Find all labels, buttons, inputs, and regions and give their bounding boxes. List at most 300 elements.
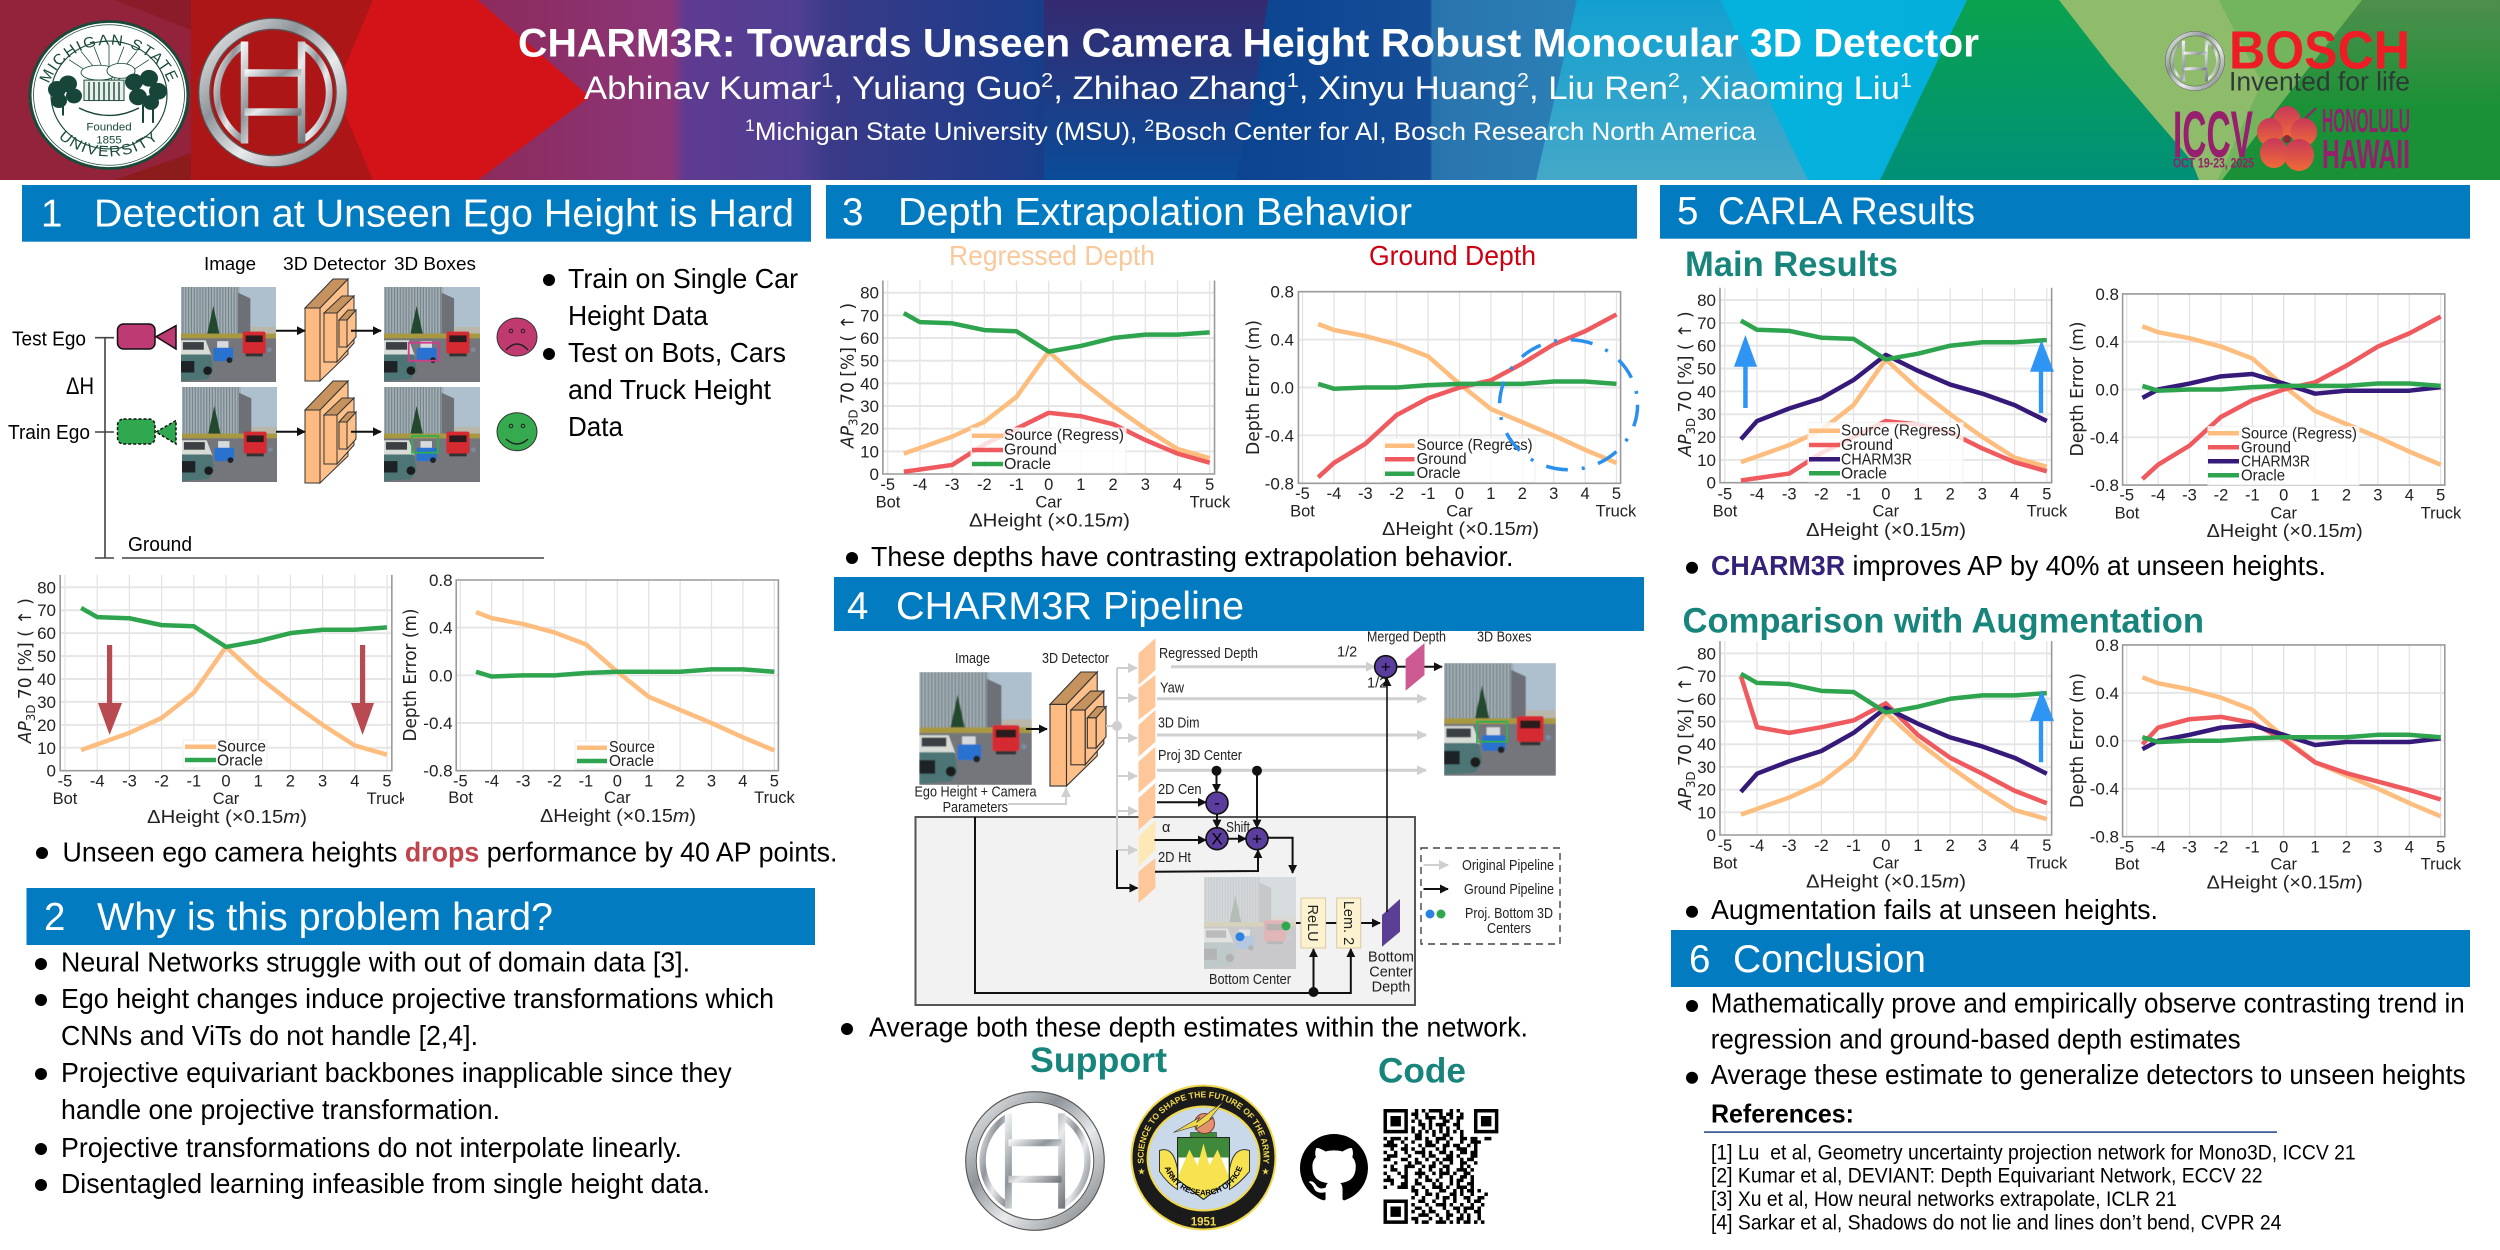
diagram: pipeline: + xyxy=(1381,658,1391,676)
chart: depth error source vs oracle: 0.4 xyxy=(429,619,453,638)
logo: Army Research Office: ARMY RESEARCH OFFICE xyxy=(1164,1166,1242,1196)
legend: Oracle xyxy=(2241,467,2285,484)
chart: AP regressed vs ground: 10 xyxy=(860,442,879,461)
heading 1 xyxy=(22,185,811,242)
authors: , Xinyu Huang xyxy=(1299,70,1517,106)
chart: depth error source vs oracle: 2 xyxy=(676,773,685,791)
legend xyxy=(1384,437,1535,482)
chart: AP augmentation comparison: 30 xyxy=(1697,758,1716,777)
ReLU box: ReLU xyxy=(1304,904,1320,942)
chart: depth augmentation comparison: 5 xyxy=(2436,838,2445,856)
chart: AP source vs oracle: 70 [%] ( ↑ ) xyxy=(16,598,36,705)
references: [2] Kumar et al, DEVIANT: Depth Equivariant Network, ECCV 22 xyxy=(1711,1165,2262,1188)
diagram: pipeline: Regressed Depth xyxy=(1159,646,1258,662)
chart: AP regressed vs ground: Car xyxy=(1035,494,1062,512)
chart: depth augmentation comparison: 1 xyxy=(2311,838,2320,856)
chart: depth augmentation comparison: -3 xyxy=(2182,838,2197,856)
text: reasons list xyxy=(35,947,774,1199)
affiliations: Bosch Center for AI, Bosch Research North America xyxy=(1154,118,1756,146)
chart: AP augmentation comparison: -2 xyxy=(1814,837,1829,855)
heading 6: Conclusion xyxy=(1733,938,1926,981)
logo: ICCV Honolulu Hawaii: OCT 19-23, 2025 xyxy=(2173,155,2254,171)
subheading: comparison with augmentation: Comparison with Augmentation xyxy=(1682,601,2204,640)
chart: AP augmentation comparison: -5 xyxy=(1717,837,1732,855)
chart: depth error source vs oracle: Bot xyxy=(448,789,473,807)
diagram: pipeline: 3D Detector xyxy=(1042,651,1109,667)
authors: 2 xyxy=(1041,70,1053,92)
pipeline legend xyxy=(1421,848,1560,944)
chart: depth augmentation comparison: 0.8 xyxy=(2095,636,2119,655)
callout: dashed ellipse xyxy=(1500,340,1638,470)
chart: AP regressed vs ground: 3 xyxy=(1141,476,1150,494)
logo: Army Research Office: ★ xyxy=(1137,1166,1146,1176)
text: train and test bullets: Data xyxy=(568,411,624,442)
chart: depth augmentation comparison: 3 xyxy=(2373,838,2382,856)
text: reasons list: Neural Networks struggle with out of domain data [3]. xyxy=(61,947,690,978)
chart: AP main results: 10 xyxy=(1697,451,1716,470)
chart: depth augmentation comparison: Truck xyxy=(2421,855,2462,873)
chart: AP main results: Truck xyxy=(2027,503,2068,521)
legend xyxy=(183,738,267,770)
chart: AP augmentation comparison: 50 xyxy=(1697,712,1716,732)
chart: AP source vs oracle: 0 xyxy=(47,762,56,781)
subtitle: ground depth: Ground Depth xyxy=(1369,240,1536,271)
chart: AP augmentation comparison: 20 xyxy=(1697,781,1716,800)
pipeline legend: Ground Pipeline xyxy=(1464,882,1554,898)
diagram: pipeline: Ego Height + Camera xyxy=(914,785,1037,801)
chart: AP source vs oracle: 80 xyxy=(37,578,56,597)
chart: AP augmentation comparison: 3 xyxy=(1978,837,1987,855)
chart: AP regressed vs ground: -3 xyxy=(945,476,959,494)
subtitle: regressed depth: Regressed Depth xyxy=(949,240,1155,271)
panel: section 2 why is this problem hard xyxy=(26,888,815,1199)
text: reasons list: CNNs and ViTs do not handle [2,4]. xyxy=(61,1020,478,1051)
chart: depth error source vs oracle: -0.8 xyxy=(423,762,453,781)
affiliations: Michigan State University (MSU), xyxy=(755,118,1144,146)
chart: depth main results: -2 xyxy=(2214,487,2228,505)
chart: depth error source vs oracle: Car xyxy=(604,789,631,807)
chart: depth error source vs oracle: -4 xyxy=(484,773,499,791)
logo: Bosch armature large xyxy=(199,18,347,167)
logo: Bosch armature support xyxy=(966,1092,1104,1230)
chart: AP augmentation comparison: 70 xyxy=(1697,667,1716,686)
pipeline legend: Centers xyxy=(1487,921,1531,937)
legend: Source xyxy=(609,739,655,756)
text: train and test bullets: Height Data xyxy=(568,300,709,331)
diagram: pipeline xyxy=(914,630,1560,1005)
chart: depth augmentation comparison: 2 xyxy=(2342,838,2351,856)
chart: AP regressed vs ground: Bot xyxy=(876,494,901,512)
logo: ICCV Honolulu Hawaii xyxy=(2173,97,2410,177)
diagram: pipeline: Merged Depth xyxy=(1367,630,1446,646)
text: train and test bullets xyxy=(543,263,798,442)
chart: depth augmentation comparison: -0.8 xyxy=(2090,828,2119,847)
ground pipeline box xyxy=(916,817,1415,1005)
chart: AP augmentation comparison: 10 xyxy=(1697,803,1716,822)
chart: depth error regressed vs ground: 0.0 xyxy=(1270,378,1294,398)
chart: depth main results: -1 xyxy=(2245,487,2260,505)
chart: AP augmentation comparison: ΔHeight (×0.15 m) xyxy=(1806,871,1966,891)
text: conclusion bullets: Average these estimate to generalize detectors to unseen heights xyxy=(1711,1059,2466,1090)
bottom center image xyxy=(1204,877,1296,969)
chart: depth main results: -4 xyxy=(2151,487,2165,505)
footer strip xyxy=(0,1056,2500,1236)
legend: Source xyxy=(217,738,266,756)
logo: ICCV Honolulu Hawaii: HAWAII xyxy=(2322,131,2410,177)
chart: AP regressed vs ground: 50 xyxy=(860,352,879,371)
authors: , Liu Ren xyxy=(1529,70,1668,106)
heading 3 xyxy=(826,185,1637,239)
chart: AP regressed vs ground: 40 xyxy=(860,374,879,393)
chart: depth error source vs oracle: 1 xyxy=(644,773,653,791)
diagram: pipeline: Image xyxy=(955,651,990,667)
chart: AP main results: 70 xyxy=(1697,314,1716,333)
panel: support and code xyxy=(965,1041,1498,1231)
heading 5: CARLA Results xyxy=(1718,190,1975,233)
references: [4] Sarkar et al, Shadows do not lie and lines don’t bend, CVPR 24 xyxy=(1711,1211,2282,1234)
legend: Source (Regress) xyxy=(2241,425,2357,442)
chart: AP main results: -2 xyxy=(1814,485,1829,503)
text: drop takeaway: Unseen ego camera heights drops performance by 40 AP points. xyxy=(62,837,838,868)
chart: AP regressed vs ground: -4 xyxy=(913,476,927,494)
chart: AP main results: ΔHeight (×0.15 m) xyxy=(1806,520,1966,540)
chart: depth error source vs oracle: Depth Error (m) xyxy=(401,608,421,742)
chart: depth error source vs oracle: 0 xyxy=(613,773,622,791)
icon: sad face xyxy=(497,318,537,356)
chart: depth error regressed vs ground: 0.4 xyxy=(1270,331,1294,350)
chart: AP source vs oracle: 1 xyxy=(254,773,263,791)
legend: CHARM3R xyxy=(1841,451,1912,468)
chart: depth error regressed vs ground: -0.4 xyxy=(1265,426,1294,445)
logo: Bosch Invented for life: BOSCH xyxy=(2229,20,2410,80)
chart: AP regressed vs ground: 20 xyxy=(860,420,879,439)
chart: depth augmentation comparison xyxy=(2068,636,2462,892)
chart: depth error regressed vs ground: Depth Error (m) xyxy=(1244,320,1264,455)
diagram: pipeline: Parameters xyxy=(943,800,1008,816)
legend: CHARM3R xyxy=(2241,453,2310,470)
chart: AP source vs oracle: 0 xyxy=(221,773,231,791)
chart: AP regressed vs ground: 0 xyxy=(1044,476,1053,494)
chart: depth main results: 5 xyxy=(2436,487,2445,505)
chart: AP augmentation comparison: AP xyxy=(1676,788,1696,811)
chart: AP source vs oracle: 30 xyxy=(37,693,56,712)
legend: Ground xyxy=(2241,439,2291,456)
diagram: pipeline: 1/2 xyxy=(1337,645,1357,661)
chart: depth main results: 4 xyxy=(2405,487,2414,505)
chart: depth error source vs oracle: 5 xyxy=(770,773,779,791)
chart: AP main results: 2 xyxy=(1946,485,1955,503)
arrow: improvement at bot height xyxy=(1734,335,1757,408)
heading 2: 2 xyxy=(44,896,65,939)
header banner xyxy=(0,0,2500,180)
legend: Oracle xyxy=(1841,465,1887,482)
authors: , Zhihao Zhang xyxy=(1053,70,1287,106)
heading 5 xyxy=(1660,185,2470,239)
diagram: ego camera heights: Image xyxy=(204,254,256,274)
chart: AP augmentation comparison: 60 xyxy=(1697,690,1716,709)
panel: section 6 conclusion xyxy=(1671,930,2470,1234)
legend: Source (Regress) xyxy=(1841,423,1961,440)
chart: AP augmentation comparison: Car xyxy=(1873,854,1900,872)
chart: depth error regressed vs ground: 4 xyxy=(1581,485,1590,503)
chart: AP augmentation comparison xyxy=(1676,641,2068,891)
chart: depth main results: -3 xyxy=(2182,487,2197,505)
text: augmentation fails: Augmentation fails at unseen heights. xyxy=(1711,894,2158,925)
Lemma 2 box xyxy=(1337,898,1361,948)
legend xyxy=(1808,423,1963,482)
legend: Ground xyxy=(1841,437,1893,454)
legend xyxy=(2208,425,2359,485)
diagram: pipeline: - xyxy=(1214,794,1220,812)
operator nodes xyxy=(1206,656,1397,850)
diagram: pipeline: 2D Ht xyxy=(1158,850,1191,866)
chart: AP main results: -3 xyxy=(1782,485,1797,503)
chart: AP regressed vs ground: 3D xyxy=(846,409,860,426)
chart: depth error regressed vs ground: 1 xyxy=(1486,485,1495,503)
legend: Oracle xyxy=(1417,465,1461,482)
title: CHARM3R: Towards Unseen Camera Height Robust Monocular 3D Detector xyxy=(518,22,1979,66)
chart: AP augmentation comparison: 4 xyxy=(2010,837,2019,855)
chart: AP augmentation comparison: 0 xyxy=(1881,837,1890,855)
heading 5: 5 xyxy=(1677,190,1698,233)
chart: AP augmentation comparison: 0 xyxy=(1707,826,1716,845)
chart: AP main results: -1 xyxy=(1846,485,1861,503)
diagram: pipeline: Bottom Center xyxy=(1209,972,1291,988)
chart: AP main results: 30 xyxy=(1697,405,1716,424)
logo: Bosch Invented for life xyxy=(2165,20,2410,97)
chart: depth error regressed vs ground: -5 xyxy=(1295,485,1310,503)
authors: 1 xyxy=(821,70,833,92)
legend: Source (Regress) xyxy=(1417,437,1533,454)
diagram: ego camera heights: Train Ego xyxy=(8,422,90,444)
chart: AP main results: 4 xyxy=(2010,485,2019,503)
chart: AP source vs oracle: Truck xyxy=(367,790,408,808)
chart: AP regressed vs ground xyxy=(838,280,1231,531)
chart: AP augmentation comparison: 80 xyxy=(1697,644,1716,663)
legend: Ground xyxy=(1417,451,1467,468)
chart: AP regressed vs ground: AP xyxy=(838,426,858,449)
diagram: pipeline: X xyxy=(1211,830,1223,848)
chart: AP source vs oracle: AP xyxy=(16,721,36,744)
chart: AP main results: Bot xyxy=(1713,503,1738,521)
legend xyxy=(575,739,658,770)
affiliations: 2 xyxy=(1144,116,1154,135)
chart: AP source vs oracle: -4 xyxy=(90,773,105,791)
heading 6: 6 xyxy=(1689,938,1710,981)
legend: Source (Regress) xyxy=(1004,427,1124,444)
chart: depth error regressed vs ground: Truck xyxy=(1596,503,1637,521)
chart: AP regressed vs ground: 80 xyxy=(860,284,879,303)
chart: depth error source vs oracle: -0.4 xyxy=(423,714,453,733)
chart: AP main results: 60 xyxy=(1697,337,1716,356)
text: reasons list: Ego height changes induce projective transformations which xyxy=(61,983,774,1014)
chart: AP regressed vs ground: 30 xyxy=(860,397,879,416)
arrow: gap at truck height xyxy=(2030,690,2054,762)
heading 3: 3 xyxy=(842,191,863,234)
diagram: ego camera heights: 3D Detector xyxy=(283,254,386,274)
chart: depth error regressed vs ground: 0 xyxy=(1455,485,1464,503)
chart: AP regressed vs ground: -2 xyxy=(977,476,992,494)
chart: AP source vs oracle: 60 xyxy=(37,624,56,643)
ReLU box xyxy=(1301,898,1326,948)
chart: depth augmentation comparison: Bot xyxy=(2115,855,2140,873)
chart: AP source vs oracle: 40 xyxy=(37,670,56,689)
chart: AP augmentation comparison: 5 xyxy=(2042,837,2051,855)
chart: depth error regressed vs ground: ΔHeight (×0.15 m) xyxy=(1382,519,1539,539)
diagram: ego camera heights: ΔH xyxy=(66,373,94,400)
heading 4 xyxy=(834,577,1644,631)
chart: depth main results xyxy=(2068,285,2462,541)
references: [3] Xu et al, How neural networks extrapolate, ICLR 21 xyxy=(1711,1188,2177,1211)
authors: , Yuliang Guo xyxy=(833,70,1041,106)
chart: AP source vs oracle: 50 xyxy=(37,647,56,666)
legend: Oracle xyxy=(609,753,654,770)
chart: depth error source vs oracle: 4 xyxy=(738,773,747,791)
legend: Oracle xyxy=(1004,456,1051,473)
chart: AP source vs oracle: -1 xyxy=(186,773,201,791)
chart: depth error regressed vs ground: 3 xyxy=(1549,485,1558,503)
chart: AP source vs oracle: 70 xyxy=(37,601,56,620)
diagram: pipeline: Proj 3D Center xyxy=(1158,748,1242,764)
chart: depth main results: 3 xyxy=(2373,487,2382,505)
chart: AP source vs oracle: -5 xyxy=(58,773,72,791)
chart: depth main results: 0.0 xyxy=(2095,380,2119,400)
text: conclusion bullets: regression and ground-based depth estimates xyxy=(1711,1023,2241,1054)
text: reasons list: Projective transformations do not interpolate linearly. xyxy=(61,1132,682,1163)
chart: AP main results: AP xyxy=(1676,434,1696,457)
chart: AP augmentation comparison: 1 xyxy=(1913,837,1923,855)
chart: AP main results: 5 xyxy=(2042,485,2051,503)
chart: depth main results: -0.4 xyxy=(2090,428,2119,447)
chart: depth error source vs oracle: -1 xyxy=(579,773,593,791)
references: References: xyxy=(1711,1099,1854,1129)
text: reasons list: handle one projective transformation. xyxy=(61,1094,500,1125)
references xyxy=(1704,1099,2356,1234)
chart: AP main results: 40 xyxy=(1697,382,1716,401)
QR code xyxy=(1384,1109,1498,1224)
chart: AP source vs oracle: Car xyxy=(213,790,240,808)
chart: AP augmentation comparison: -3 xyxy=(1782,837,1797,855)
chart: AP main results: 0 xyxy=(1881,485,1890,503)
chart: AP source vs oracle xyxy=(16,575,408,827)
chart: AP regressed vs ground: 70 xyxy=(860,306,879,325)
logo: Army Research Office: 1951 xyxy=(1191,1216,1217,1228)
chart: depth error source vs oracle: 0.8 xyxy=(429,571,453,590)
chart: AP augmentation comparison: Bot xyxy=(1713,854,1738,872)
chart: AP source vs oracle: 10 xyxy=(37,739,56,758)
logo: ICCV Honolulu Hawaii: ICCV xyxy=(2173,97,2253,171)
icon: happy face xyxy=(497,413,537,451)
seal text xyxy=(39,34,178,156)
chart: depth augmentation comparison: 0.4 xyxy=(2095,684,2119,703)
chart: AP regressed vs ground: -5 xyxy=(880,476,895,494)
chart: AP source vs oracle: 3 xyxy=(318,773,327,791)
chart: AP augmentation comparison: 40 xyxy=(1697,735,1716,754)
text: conclusion bullets xyxy=(1686,988,2466,1090)
icon: train camera xyxy=(118,419,176,444)
chart: AP regressed vs ground: -1 xyxy=(1009,476,1024,494)
chart: depth error regressed vs ground: Car xyxy=(1446,503,1473,521)
heading 4: 4 xyxy=(847,585,868,628)
chart: AP main results: 70 [%] ( ↑ ) xyxy=(1676,312,1696,418)
heading 4: CHARM3R Pipeline xyxy=(896,585,1244,628)
authors: 2 xyxy=(1517,70,1529,92)
chart: depth augmentation comparison: -0.4 xyxy=(2090,780,2119,799)
chart: AP source vs oracle: 3D xyxy=(24,705,38,721)
chart: depth augmentation comparison: -4 xyxy=(2151,838,2165,856)
heading 2 xyxy=(26,888,815,945)
chart: AP main results: Car xyxy=(1873,503,1900,521)
text: reasons list: Disentagled learning infeasible from single height data. xyxy=(61,1168,710,1199)
diagram: pipeline: 2D Cen xyxy=(1158,782,1202,798)
chart: AP main results: -5 xyxy=(1717,485,1732,503)
chart: depth error regressed vs ground: -0.8 xyxy=(1265,474,1294,493)
chart: AP source vs oracle: -2 xyxy=(154,773,169,791)
chart: depth augmentation comparison: -2 xyxy=(2214,838,2228,856)
text: average takeaway: Average both these depth estimates within the network. xyxy=(869,1012,1528,1043)
chart: depth augmentation comparison: -5 xyxy=(2119,838,2134,856)
diagram: ego camera heights xyxy=(8,254,544,558)
icon: GitHub xyxy=(1300,1134,1368,1200)
chart: depth error source vs oracle: -3 xyxy=(516,773,530,791)
chart: depth main results: -5 xyxy=(2119,487,2134,505)
chart: AP augmentation comparison: 70 [%] ( ↑ ) xyxy=(1676,665,1696,771)
chart: AP augmentation comparison: Truck xyxy=(2027,854,2068,872)
chart: AP regressed vs ground: 4 xyxy=(1173,476,1182,494)
diagram: ego camera heights: Test Ego xyxy=(12,329,86,351)
chart: depth error regressed vs ground: -3 xyxy=(1358,485,1373,503)
authors: 1 xyxy=(1900,70,1912,92)
logo: Michigan State University seal xyxy=(28,20,190,170)
authors: , Xiaoming Liu xyxy=(1680,70,1900,106)
chart: AP regressed vs ground: Truck xyxy=(1190,494,1231,512)
chart: depth main results: 0.8 xyxy=(2095,285,2119,304)
diagram: pipeline: Depth xyxy=(1372,980,1410,996)
subheading: main results: Main Results xyxy=(1685,245,1898,284)
text: train and test bullets: Test on Bots, Cars xyxy=(568,337,786,368)
diagram: pipeline: Shift xyxy=(1226,820,1250,836)
chart: AP main results: -4 xyxy=(1750,485,1764,503)
heading 6 xyxy=(1671,930,2470,987)
pipeline legend: Original Pipeline xyxy=(1462,858,1554,874)
chart: AP source vs oracle: 5 xyxy=(382,773,392,791)
chart: AP regressed vs ground: 1 xyxy=(1076,476,1085,494)
chart: AP main results: 80 xyxy=(1697,291,1716,310)
legend xyxy=(971,427,1126,473)
heading: code: Code xyxy=(1378,1052,1466,1091)
chart: depth main results: Depth Error (m) xyxy=(2068,322,2088,456)
heading 1: 1 xyxy=(41,193,62,236)
chart: AP source vs oracle: ΔHeight (×0.15 m) xyxy=(147,807,307,827)
chart: depth augmentation comparison: 4 xyxy=(2405,838,2414,856)
chart: AP regressed vs ground: 5 xyxy=(1205,476,1214,494)
diagram: pipeline: 3D Boxes xyxy=(1477,630,1532,646)
chart: depth error source vs oracle: ΔHeight (×0.15 m) xyxy=(540,806,696,826)
diagram: pipeline: Center xyxy=(1369,965,1413,981)
panel: section 3 depth extrapolation xyxy=(826,185,1638,572)
legend: Oracle xyxy=(217,753,263,770)
diagram: pipeline: Bottom xyxy=(1368,950,1414,966)
text: CHARM3R improves AP: CHARM3R improves AP by 40% at unseen heights. xyxy=(1711,550,2326,581)
icon: test camera xyxy=(118,324,176,349)
chart: depth augmentation comparison: ΔHeight (×0.15 m) xyxy=(2207,872,2363,892)
diagram: pipeline: α xyxy=(1162,820,1170,836)
chart: depth error regressed vs ground: 5 xyxy=(1612,485,1621,503)
chart: depth error regressed vs ground: 2 xyxy=(1518,485,1527,503)
chart: AP main results: 0 xyxy=(1707,474,1716,493)
logo: Army Research Office: ★ xyxy=(1261,1166,1270,1176)
chart: AP augmentation comparison: 2 xyxy=(1946,837,1955,855)
